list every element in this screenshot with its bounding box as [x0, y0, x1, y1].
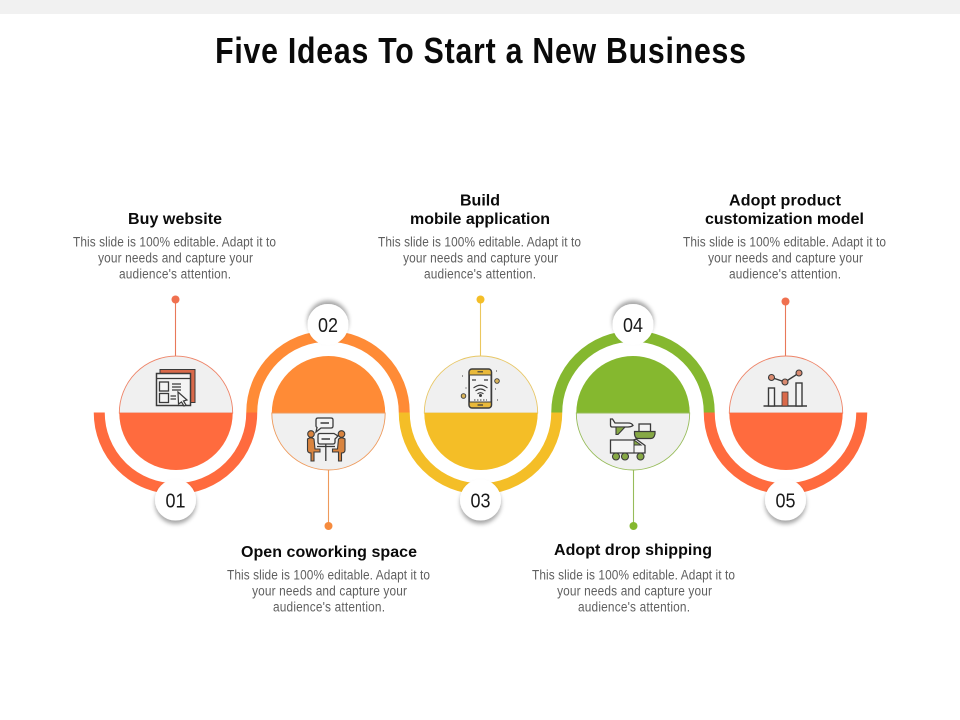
step 01	[73, 211, 276, 520]
text 01: your needs and capture your	[98, 250, 254, 266]
text 05: customization model	[705, 211, 864, 228]
number 05	[765, 480, 806, 520]
number 02	[308, 304, 348, 345]
text 03: audience's attention.	[424, 266, 536, 282]
text 01: This slide is 100% editable. Adapt it to	[73, 234, 276, 250]
step 03	[378, 192, 581, 520]
number 04	[612, 304, 654, 345]
text 01: audience's attention.	[119, 266, 231, 282]
icon: mobile phone wifi	[461, 369, 499, 408]
text 05: your needs and capture your	[708, 250, 864, 266]
text 04: audience's attention.	[578, 599, 690, 615]
icon: plane ship truck	[610, 419, 655, 460]
arc 05	[709, 412, 862, 489]
icon: website window	[156, 370, 195, 406]
step 05	[683, 192, 886, 520]
circle 05	[729, 356, 843, 470]
text 05	[683, 192, 886, 282]
text 03: mobile application	[410, 211, 550, 228]
text 04: your needs and capture your	[557, 583, 713, 599]
number 03: 03	[470, 490, 490, 512]
top band	[0, 0, 960, 14]
arc 01	[99, 412, 252, 489]
circle 01	[119, 356, 233, 470]
number 01	[155, 480, 196, 520]
number 02: 02	[318, 315, 338, 337]
arc 04	[557, 336, 709, 412]
text 03	[378, 192, 581, 282]
text 04: This slide is 100% editable. Adapt it to	[532, 567, 735, 583]
text 04: Adopt drop shipping	[554, 542, 712, 559]
arc 02	[252, 336, 404, 412]
text 03: Build	[460, 192, 500, 210]
circle 03	[424, 356, 538, 470]
leader 01	[172, 296, 180, 357]
leader 03	[476, 296, 484, 357]
text 04	[532, 542, 735, 615]
wave ribbon arcs	[99, 336, 862, 489]
number 01: 01	[166, 490, 186, 512]
number 03	[460, 480, 501, 520]
text 02	[227, 544, 430, 615]
leader 04	[630, 470, 638, 530]
number 04: 04	[623, 315, 643, 337]
text 02: This slide is 100% editable. Adapt it to	[227, 567, 430, 583]
text 05: audience's attention.	[729, 266, 841, 282]
text 01: Buy website	[128, 211, 222, 228]
step 02	[227, 304, 430, 615]
text 02: Open coworking space	[241, 544, 417, 561]
text 05: Adopt product	[729, 192, 842, 210]
circle 04	[576, 356, 690, 470]
text 03: your needs and capture your	[403, 250, 559, 266]
icon: coworking meeting	[308, 418, 345, 461]
leader 05	[782, 298, 790, 357]
number 05: 05	[776, 490, 796, 512]
text 02: audience's attention.	[273, 599, 385, 615]
text 01	[73, 211, 276, 282]
icon: bar and line chart	[764, 370, 807, 406]
circle 02	[272, 356, 385, 470]
text 05: This slide is 100% editable. Adapt it to	[683, 234, 886, 250]
arc 03	[404, 412, 557, 489]
step 04	[532, 304, 735, 615]
title: Five Ideas To Start a New Business	[215, 32, 746, 72]
leader 02	[324, 470, 332, 530]
text 03: This slide is 100% editable. Adapt it to	[378, 234, 581, 250]
text 02: your needs and capture your	[252, 583, 408, 599]
